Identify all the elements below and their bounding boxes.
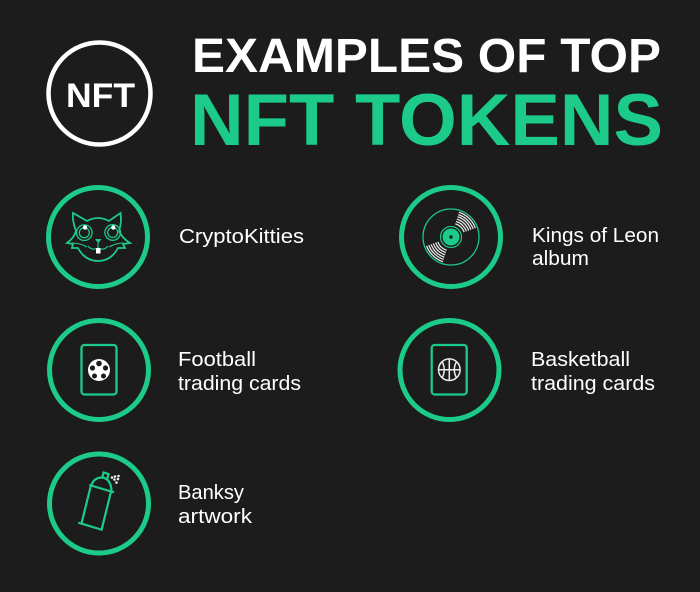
label: Basketball trading cards: Basketball bbox=[531, 349, 630, 371]
item: CryptoKitties bbox=[48, 188, 304, 286]
logo: NFT circle bbox=[48, 42, 150, 144]
label: Banksy artwork: artwork bbox=[178, 506, 253, 528]
icon: cat face bbox=[48, 188, 148, 286]
icon: football card bbox=[50, 320, 148, 420]
title: NFT TOKENS bbox=[190, 80, 663, 161]
item: Football trading cards bbox=[50, 320, 301, 420]
logo: NFT circle: NFT bbox=[66, 77, 135, 115]
icon: basketball card bbox=[400, 320, 499, 420]
label: CryptoKitties: CryptoKitties bbox=[179, 226, 304, 248]
label: Football trading cards: trading cards bbox=[178, 373, 301, 395]
label: Football trading cards: Football bbox=[178, 349, 256, 371]
icon: vinyl record bbox=[402, 188, 500, 286]
title bbox=[190, 30, 663, 161]
item: Banksy artwork bbox=[50, 454, 253, 553]
item: Basketball trading cards bbox=[400, 320, 655, 420]
label: Kings of Leon album: album bbox=[532, 248, 589, 270]
label: Basketball trading cards: trading cards bbox=[531, 373, 655, 395]
label: Kings of Leon album: Kings of Leon bbox=[532, 225, 659, 247]
icon: spray can bbox=[50, 454, 148, 553]
title: EXAMPLES OF TOP bbox=[192, 30, 661, 83]
label: Banksy artwork: Banksy bbox=[178, 482, 244, 504]
item: Kings of Leon album bbox=[402, 188, 659, 286]
